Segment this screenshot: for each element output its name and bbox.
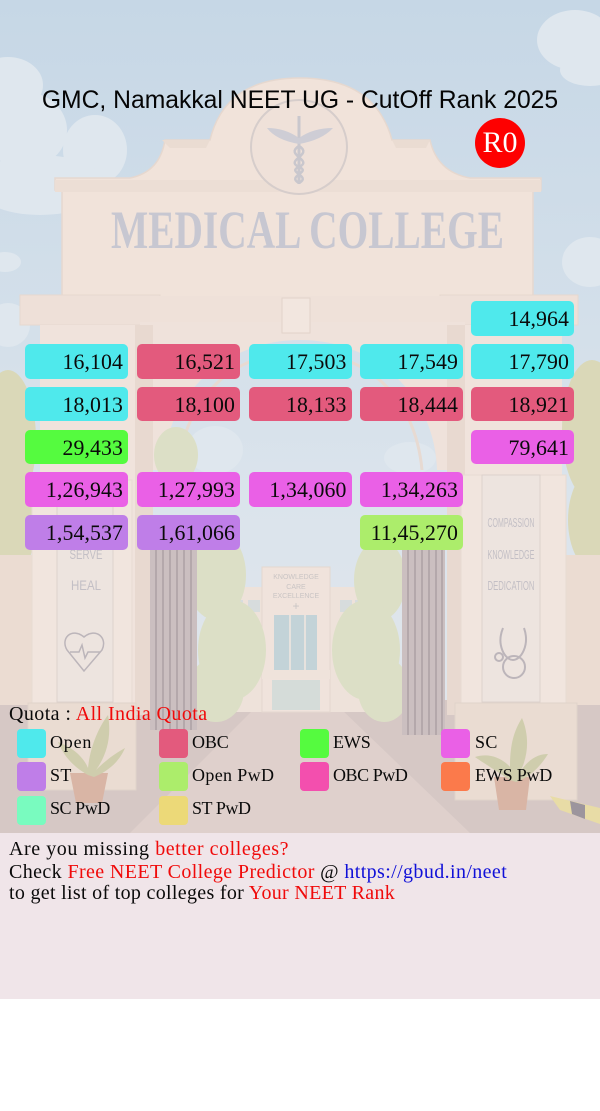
garden trees [154, 427, 410, 722]
legend: OBC [159, 729, 229, 758]
distant hospital building: EXCELLENCE [273, 593, 319, 600]
legend: Open PwD: Open PwD [192, 764, 274, 784]
legend: SC [441, 729, 498, 758]
row 5: 1,26,943 [46, 478, 123, 502]
row 5: 1,27,993 [158, 478, 235, 502]
legend: OBC: OBC [192, 732, 229, 752]
icon: stethoscope [495, 628, 526, 678]
row 3 [25, 387, 574, 421]
legend: EWS PwD: EWS PwD [475, 764, 552, 784]
medallion [251, 100, 347, 194]
title: GMC, Namakkal NEET UG - CutOff Rank 2025 [42, 87, 558, 114]
row 3: 18,100 [174, 392, 235, 416]
legend: OBC PwD: OBC PwD [333, 764, 407, 784]
iron gates [150, 530, 445, 735]
legend: SC PwD [17, 796, 110, 825]
legend: SC PwD: SC PwD [50, 798, 110, 818]
background illustration: medical college gate [0, 0, 600, 833]
round badge: R0 [482, 126, 518, 159]
legend: Open: Open [50, 732, 92, 752]
quota heading: Quota : All India Quota [9, 703, 208, 725]
legend: Open PwD [159, 762, 274, 791]
potted plants [58, 715, 548, 810]
trees left and right [0, 360, 600, 580]
legend: Open [17, 729, 92, 758]
distant hospital building: + [292, 599, 300, 613]
distant hospital building [228, 567, 375, 712]
promo link line: Check Free NEET College Predictor @ https://gbud.in/neet [9, 861, 507, 883]
row 6 [25, 515, 463, 550]
pillar inscriptions: COMPASSION [488, 515, 534, 530]
row 6: 1,61,066 [158, 521, 235, 545]
round badge [475, 118, 525, 168]
distant hospital building: KNOWLEDGE [273, 574, 319, 581]
row 2: 17,549 [397, 350, 458, 374]
row 3: 18,921 [508, 392, 569, 416]
row 2: 17,790 [508, 350, 569, 374]
distant hospital building: CARE [286, 584, 306, 591]
row 4 [25, 430, 574, 464]
pillar inscriptions: KNOWLEDGE [488, 547, 535, 562]
pillar inscriptions: HEAL [71, 577, 101, 593]
row 1: 14,964 [508, 307, 569, 331]
legend: ST [17, 762, 72, 791]
row 3: 18,133 [286, 392, 346, 416]
pediment [55, 78, 541, 300]
panel: college predictor promotion [0, 833, 600, 999]
row 6: 11,45,270 [371, 521, 458, 545]
arch and pillars [0, 295, 600, 800]
row 2: 17,503 [286, 350, 346, 374]
row 5: 1,34,060 [269, 478, 346, 502]
legend: ST PwD: ST PwD [192, 798, 250, 818]
row 3: 18,444 [397, 392, 458, 416]
legend [17, 729, 552, 825]
legend: EWS: EWS [333, 732, 371, 752]
icon: heart [65, 633, 104, 671]
row 2: 16,104 [62, 350, 123, 374]
row 4: 29,433 [62, 436, 123, 460]
promo question: Are you missing better colleges? [9, 838, 289, 860]
legend: ST: ST [50, 764, 72, 784]
legend: OBC PwD [300, 762, 408, 791]
legend: EWS PwD [441, 762, 552, 791]
legend: EWS [300, 729, 371, 758]
legend: SC: SC [475, 732, 498, 752]
kerb stripes [550, 796, 600, 824]
row 2 [25, 344, 574, 379]
legend: ST PwD [159, 796, 250, 825]
row 5 [25, 472, 463, 507]
pillar inscriptions: SERVE [70, 546, 102, 562]
pillar inscriptions [70, 515, 535, 593]
row 4: 79,641 [508, 436, 569, 460]
row 5: 1,34,263 [381, 478, 458, 502]
pillar inscriptions: DEDICATION [488, 578, 534, 593]
row 6: 1,54,537 [46, 521, 123, 545]
promo rank line: to get list of top colleges for Your NEET Rank [9, 882, 395, 904]
row 3: 18,013 [62, 392, 123, 416]
row 2: 16,521 [174, 350, 235, 374]
rank table [25, 301, 574, 550]
road [0, 700, 600, 833]
